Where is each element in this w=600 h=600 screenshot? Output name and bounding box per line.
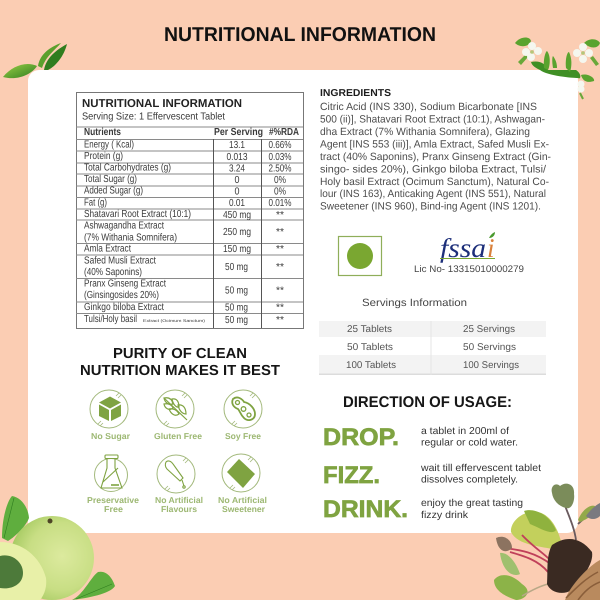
RDA values: 0.66%	[268, 140, 292, 151]
step descriptions: regular or cold water.	[421, 438, 518, 448]
badge labels: No Sugar	[91, 431, 131, 441]
amla leaf lower	[72, 572, 115, 600]
nutrient names: Total Carbohydrates (g)	[84, 163, 171, 174]
red stems	[505, 535, 556, 572]
RDA values: 2.50%	[268, 164, 292, 174]
servings table: 25 Tablets	[347, 324, 392, 335]
ingredients text: tract (40% Saponins), Pranx Ginseng Extract (Gin-	[320, 151, 551, 163]
illustration: plant with soil and rope	[494, 484, 600, 600]
badge labels: Flavours	[161, 504, 197, 514]
step words	[323, 424, 408, 523]
RDA values: 0.01%	[268, 198, 292, 209]
RDA values: 0%	[274, 186, 286, 198]
direction heading: DIRECTION OF USAGE:	[343, 394, 512, 411]
white content panel	[28, 70, 578, 533]
nutrient names: Extract (Ocimum Sanctum)	[143, 318, 206, 323]
illustration: amla fruit and leaves	[0, 496, 115, 600]
step descriptions: wait till effervescent tablet	[420, 463, 541, 474]
RDA values: **	[276, 210, 284, 221]
servings table: 25 Servings	[463, 324, 515, 335]
RDA values: **	[276, 315, 284, 326]
badge: preservative free	[94, 455, 128, 492]
icon: white flowers	[522, 42, 593, 92]
icon: top-left leaves	[3, 43, 67, 78]
badge: gluten free	[156, 390, 194, 428]
step words: FIZZ.	[323, 462, 380, 489]
ingredients text: Citric Acid (INS 330), Sodium Bicarbonate [INS	[320, 101, 537, 113]
serving size: Serving Size: 1 Effervescent Tablet	[82, 112, 225, 122]
badge: no sugar	[90, 390, 128, 428]
nutrient names: Tulsi/Holy basil	[84, 314, 137, 325]
nutrient names: Amla Extract	[84, 244, 131, 255]
purity heading: NUTRITION MAKES IT BEST	[80, 363, 280, 379]
column headers: #%RDA	[269, 127, 300, 138]
nutrient names: (7% Withania Somnifera)	[84, 232, 177, 243]
purity heading	[80, 346, 280, 379]
ingredients heading: INGREDIENTS	[320, 88, 391, 99]
icon: vegetarian mark	[338, 236, 382, 276]
badge labels: No Artificial	[218, 495, 267, 505]
ingredients text: lour (INS 163), Anticaking Agent (INS 551), Natural	[320, 188, 546, 200]
badge labels: Free	[104, 504, 123, 514]
step descriptions: dissolves completely.	[421, 474, 518, 486]
ingredients text: 500 (ii)], Shatavari Root Extract (10:1), Ashwagan-	[320, 114, 545, 126]
badge labels: Sweetener	[222, 504, 266, 514]
step descriptions	[420, 426, 541, 521]
per serving values: 50 mg	[225, 302, 248, 314]
per serving values: 0	[234, 186, 240, 198]
fssai logo: fssa	[440, 233, 486, 263]
ingredients text: Holy basil Extract (Ocimum Sanctum), Natural Co-	[320, 176, 549, 188]
per serving values: 50 mg	[225, 262, 248, 273]
leafy stems	[563, 500, 596, 540]
RDA values: **	[276, 227, 284, 238]
per serving values: 50 mg	[225, 286, 248, 296]
ingredients text: Sweetener (INS 960), Bind-ing Agent (INS 1201).	[320, 200, 541, 212]
amla seed	[0, 555, 23, 588]
servings table: 100 Servings	[463, 360, 519, 371]
RDA values: 0.03%	[268, 152, 292, 163]
fssai logo: i	[487, 233, 495, 263]
servings table: 50 Tablets	[347, 342, 393, 353]
step words: DROP.	[323, 424, 399, 451]
per serving values: 150 mg	[223, 244, 251, 255]
badge labels: Preservative	[87, 495, 139, 505]
badge labels: No Artificial	[155, 495, 203, 505]
amla leaf upper	[2, 496, 29, 541]
per serving values: 0.013	[226, 152, 248, 163]
RDA values	[268, 140, 292, 326]
cut amla half	[0, 542, 46, 600]
ingredients text: dha Extract (7% Withania Somnifera), Glazing	[320, 126, 530, 138]
step words: DRINK.	[323, 496, 408, 523]
per serving values: 0.01	[229, 198, 245, 209]
ingredients text: singo- sides 20%), Ginkgo biloba Extract, Tulsi/	[320, 164, 546, 176]
nutrient names: Pranx Ginseng Extract	[84, 279, 166, 290]
table title: NUTRITIONAL INFORMATION	[82, 98, 242, 110]
badge: no artificial sweetener	[222, 454, 260, 492]
license number: Lic No- 13315010000279	[414, 264, 524, 275]
badge labels: Soy Free	[225, 431, 261, 441]
badge labels: Gluten Free	[154, 431, 202, 441]
RDA values: 0%	[274, 175, 286, 186]
badge: soy free	[224, 390, 262, 428]
step descriptions: a tablet in 200ml of	[421, 426, 509, 437]
ingredients text: Agent [INS 553 (iii)], Amla Extract, Safed Musli Ex-	[320, 138, 549, 150]
servings table: 50 Servings	[463, 342, 516, 353]
per serving values	[223, 140, 251, 326]
per serving values: 13.1	[229, 140, 245, 151]
per serving values: 250 mg	[223, 227, 251, 238]
purity heading: PURITY OF CLEAN	[113, 346, 247, 362]
yellow-green leaves	[511, 512, 561, 550]
per serving values: 3.24	[229, 164, 245, 174]
step descriptions: fizzy drink	[421, 510, 469, 521]
nutrient names: Protein (g)	[84, 151, 123, 162]
servings table	[319, 321, 546, 375]
nutrient names: Shatavari Root Extract (10:1)	[84, 209, 191, 220]
nutrient names: Ashwagandha Extract	[84, 221, 164, 232]
nutrient names: (40% Saponins)	[84, 267, 142, 278]
step descriptions: enjoy the great tasting	[421, 498, 523, 509]
soil clump	[547, 539, 592, 593]
nutrient names: Safed Musli Extract	[84, 255, 156, 266]
nutrient names: Ginkgo biloba Extract	[84, 302, 164, 313]
badge labels	[87, 431, 267, 514]
nutrition table	[76, 92, 304, 328]
column headers: Per Serving	[214, 127, 263, 138]
RDA values: **	[276, 302, 284, 314]
amla stem spot	[48, 518, 52, 524]
icon: top-right flower sprigs	[515, 37, 600, 99]
table grid	[76, 92, 304, 328]
column headers: Nutrients	[84, 127, 121, 138]
nutrient names: (Ginsingosides 20%)	[84, 290, 159, 301]
nutrient names: Fat (g)	[84, 197, 107, 208]
servings heading: Servings Information	[362, 297, 467, 309]
ingredients text	[320, 101, 551, 212]
per serving values: 0	[234, 175, 240, 186]
whole amla	[10, 516, 94, 600]
main title: NUTRITIONAL INFORMATION	[164, 24, 436, 46]
rope	[565, 560, 600, 600]
RDA values: **	[276, 286, 284, 296]
per serving values: 450 mg	[223, 210, 251, 221]
column headers	[84, 127, 300, 138]
nutrient names: Total Sugar (g)	[84, 174, 137, 185]
badge: no artificial flavours	[157, 455, 195, 493]
nutrient names: Energy ( Kcal)	[84, 139, 134, 150]
ingredients block	[320, 88, 551, 212]
nutrient names: Added Sugar (g)	[84, 186, 143, 197]
per serving values: 50 mg	[225, 315, 248, 326]
RDA values: **	[276, 244, 284, 255]
servings table: 100 Tablets	[346, 360, 396, 371]
green lower leaves	[500, 553, 520, 575]
RDA values: **	[276, 262, 284, 273]
nutrient names	[84, 139, 206, 325]
